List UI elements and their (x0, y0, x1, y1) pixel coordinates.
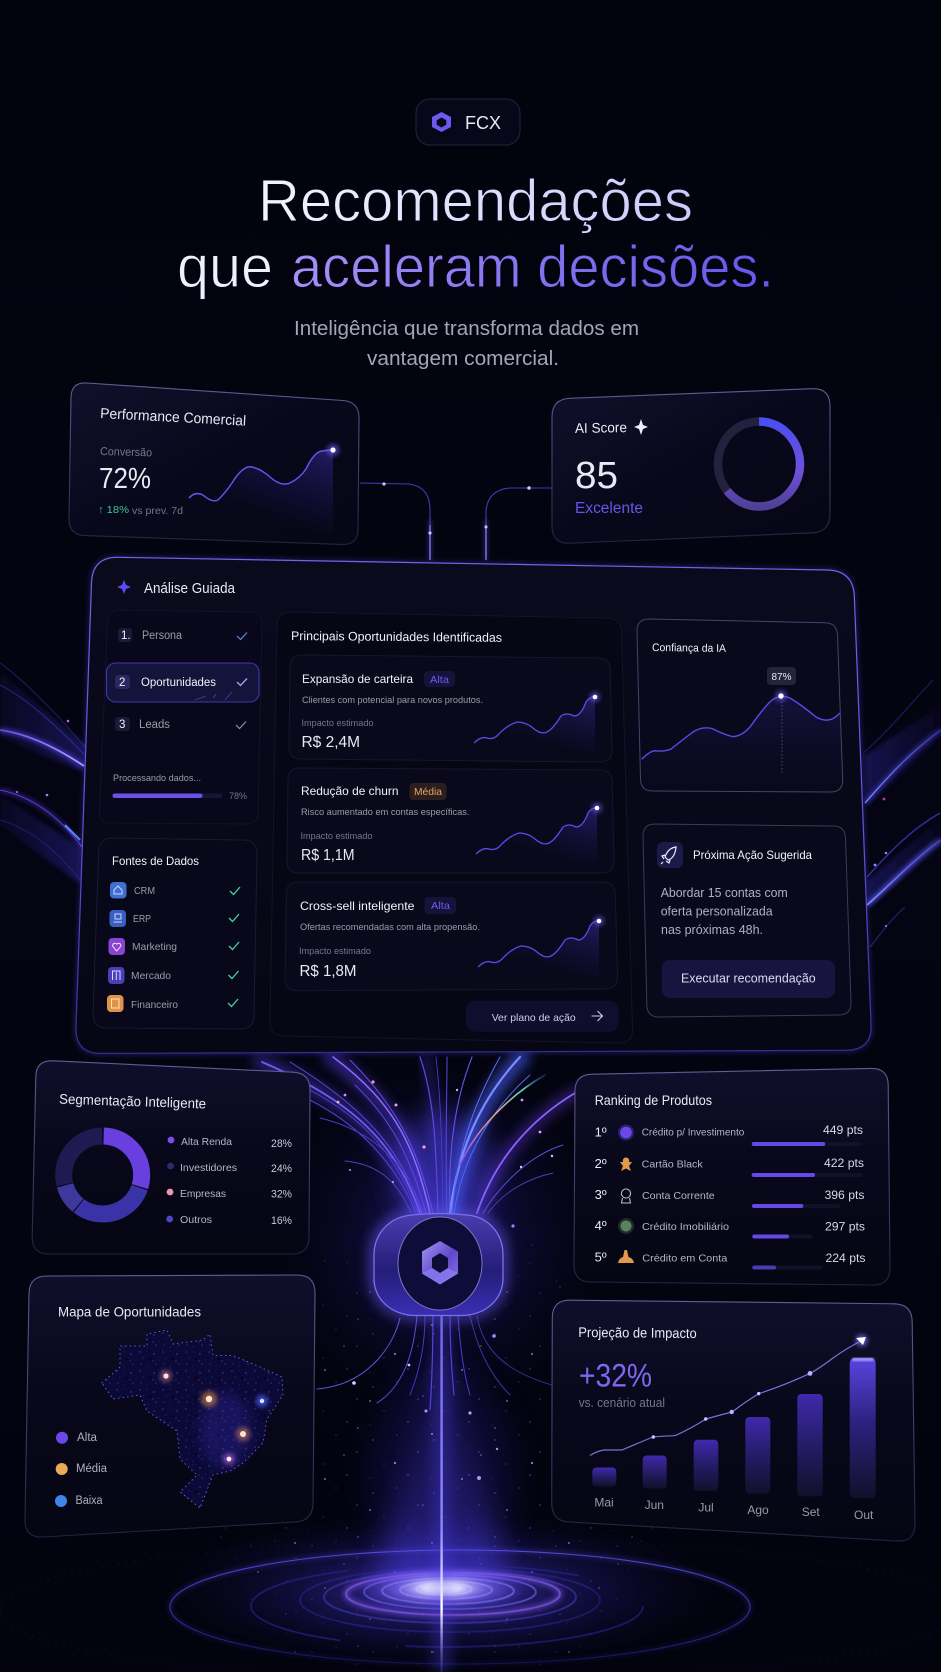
source: Mercado: Mercado (131, 970, 171, 982)
ground glow and rings (0, 1330, 941, 1672)
decorative side light streaks, left (0, 663, 85, 884)
legend: 24% (271, 1163, 292, 1175)
icon: sparkle (634, 419, 648, 435)
sub-panel: Principais Oportunidades (270, 612, 633, 1043)
panel: Projeção de Impacto: Projeção de Impacto (578, 1324, 697, 1341)
tooltip: 87% (772, 672, 792, 683)
row 4: Crédito Imobiliário (642, 1221, 729, 1233)
row 4: 4º (595, 1218, 607, 1233)
sparkline (476, 803, 602, 863)
donut chart (64, 1136, 142, 1214)
sparkline (189, 444, 339, 532)
opportunity card 3: R$ 1,8M (300, 963, 356, 980)
month labels: Jun (645, 1498, 664, 1512)
icon: rocket (657, 842, 683, 868)
legend (166, 1136, 292, 1227)
sparkline (474, 692, 600, 752)
step 1 (118, 628, 247, 642)
panel: AI Score: Excelente (575, 500, 643, 517)
panel: AI Score: 85 (575, 455, 618, 497)
row 5 (595, 1250, 866, 1270)
opportunity card 1: Expansão de carteira (302, 672, 413, 686)
panel: AI Score (552, 389, 830, 543)
panel: Performance Comercial: 72% (99, 463, 151, 495)
opportunity card 3 (285, 882, 618, 991)
row 2 (595, 1156, 864, 1177)
sparkline (478, 916, 604, 976)
legend: Outros (180, 1214, 212, 1226)
opportunity card 2: Risco aumentado em contas específicas. (301, 807, 470, 818)
sub-panel: Fontes de Dados: Fontes de Dados (112, 854, 199, 868)
source: Mercado (108, 967, 238, 984)
legend: Alta (77, 1432, 98, 1444)
icon: FCX hexagon (432, 112, 451, 132)
row 5: 5º (595, 1250, 607, 1264)
panel heading: Análise Guiada (144, 581, 236, 597)
source: ERP: ERP (133, 913, 151, 925)
energy streams below hub (317, 1316, 552, 1480)
step 3: Leads (139, 719, 170, 731)
step 2 active (106, 663, 259, 702)
row 2: 2º (595, 1156, 607, 1171)
tag: Alta (431, 900, 450, 912)
panel: Mapa de Oportunidades (25, 1275, 315, 1537)
legend: 32% (271, 1189, 292, 1201)
opportunity card 3: Cross-sell inteligente (300, 899, 415, 913)
bar chart (592, 1358, 876, 1498)
button: Executar recomendação (662, 960, 835, 998)
row 4: 297 pts (825, 1220, 865, 1234)
opportunity card 1: Impacto estimado (302, 718, 374, 729)
title: que (177, 234, 273, 300)
month labels: Set (802, 1505, 820, 1519)
step 1: Persona (142, 630, 183, 642)
legend: 16% (271, 1215, 292, 1227)
brand pill (416, 99, 520, 145)
row 3: 396 pts (824, 1188, 864, 1202)
source: Financeiro: Financeiro (131, 999, 178, 1011)
opportunity card 2: R$ 1,1M (301, 847, 354, 864)
row 2: Cartão Black (642, 1158, 703, 1170)
tag (410, 783, 446, 800)
connectors to main panel (360, 482, 552, 560)
opportunity card 1: R$ 2,4M (302, 734, 360, 751)
recommendation text: nas próximas 48h. (661, 922, 763, 937)
sub-panel: steps (99, 610, 262, 824)
energy streams above hub (260, 1057, 575, 1228)
decorative side light streaks, right (863, 680, 941, 947)
subtitle: Inteligência que transforma dados em (294, 318, 639, 340)
trend line (590, 1334, 868, 1456)
source: Marketing: Marketing (132, 941, 177, 953)
row 3 (595, 1187, 864, 1208)
panel: AI Score: AI Score (575, 419, 627, 436)
sub-panel: Confiança da IA: Confiança da IA (652, 642, 727, 655)
progress: Processando dados... (113, 773, 201, 784)
panel: Projeção de Impacto (552, 1300, 915, 1541)
trend delta: vs prev. 7d (132, 505, 183, 517)
row 3: 3º (595, 1187, 607, 1202)
button: Ver plano de ação: Ver plano de ação (492, 1012, 576, 1024)
opportunity card 3: Impacto estimado (299, 946, 371, 957)
legend: 28% (271, 1138, 292, 1150)
row 4 (595, 1218, 865, 1238)
source: Marketing (108, 938, 239, 955)
sub-panel: Próxima Ação Sugerida: Próxima Ação Sugerida (693, 848, 812, 862)
recommendation text: oferta personalizada (661, 904, 773, 918)
row 1: Crédito p/ Investimento (642, 1128, 745, 1139)
title (177, 168, 774, 300)
title: Recomendações (258, 168, 693, 234)
tooltip (767, 667, 796, 685)
row 1: 449 pts (823, 1123, 863, 1137)
step 3: 3 (119, 719, 125, 731)
progress: 78% (229, 791, 248, 802)
starfield (214, 1240, 676, 1665)
tag: Média (414, 786, 442, 798)
row 1: 1º (595, 1124, 607, 1140)
map of Brazil (102, 1330, 283, 1508)
panel: Análise Guiada (25, 557, 915, 1541)
source: CRM: CRM (134, 885, 155, 897)
opportunity card 3: Ofertas recomendadas com alta propensão. (300, 922, 480, 933)
row 3: Conta Corrente (642, 1190, 715, 1202)
panel: Ranking de Produtos (574, 1068, 890, 1285)
panel: Projeção de Impacto: vs. cenário atual (579, 1396, 665, 1410)
panel: Performance Comercial: Performance Comercial (100, 406, 246, 430)
step 1: 1. (121, 630, 131, 642)
progress (112, 773, 248, 802)
opportunity card 1 (289, 655, 612, 762)
month labels: Jul (698, 1500, 714, 1514)
sub-panel: Próxima Ação Sugerida (643, 824, 851, 1017)
opportunity card 2: Redução de churn (301, 784, 398, 798)
brand name: FCX (465, 113, 501, 133)
panel: Segmentação Inteligente (32, 1061, 310, 1254)
row 5: Crédito em Conta (642, 1252, 727, 1264)
source: ERP (110, 910, 239, 927)
legend: Média (76, 1463, 108, 1475)
legend: Investidores (180, 1162, 237, 1174)
icon: hexagon logo (422, 1241, 458, 1284)
month labels (594, 1495, 874, 1522)
stream sparks (337, 1080, 553, 1228)
month labels: Ago (747, 1503, 769, 1517)
sub-panel: Fontes de Dados (93, 838, 257, 1029)
line chart (642, 690, 842, 790)
opportunity card 2: Impacto estimado (300, 831, 372, 842)
tag: Alta (430, 674, 449, 686)
row 1 (595, 1123, 863, 1146)
score ring (718, 422, 800, 506)
tag (424, 897, 456, 914)
row 2: 422 pts (824, 1156, 864, 1170)
month labels: Out (854, 1508, 874, 1522)
month labels: Mai (594, 1495, 614, 1509)
subtitle: vantagem comercial. (367, 348, 559, 370)
button: Executar recomendação: Executar recomendação (681, 972, 816, 986)
panel: Mapa de Oportunidades: Mapa de Oportunidades (58, 1304, 201, 1320)
sub-panel: Principais Oportunidades: Principais Oportunidades Identificadas (291, 629, 502, 645)
tag (424, 671, 455, 687)
trend delta (98, 504, 183, 517)
source: CRM (110, 882, 240, 898)
row 5: 224 pts (826, 1251, 866, 1265)
source: Financeiro (107, 995, 238, 1012)
panel: Segmentação Inteligente: Segmentação Inteligente (59, 1091, 207, 1111)
title: aceleram decisões. (291, 234, 774, 300)
legend: Alta Renda (181, 1136, 232, 1148)
central hub (374, 1214, 503, 1316)
panel: Performance Comercial: Conversão (100, 446, 152, 459)
step 3 (115, 717, 246, 731)
trend delta: ↑ 18% (98, 504, 129, 516)
recommendation text (661, 885, 788, 937)
subtitle (294, 318, 639, 370)
light beam (432, 1316, 452, 1672)
panel: Projeção de Impacto: +32% (579, 1358, 652, 1394)
panel: Ranking de Produtos: Ranking de Produtos (595, 1092, 712, 1108)
panel: Performance Comercial (69, 383, 359, 544)
opportunity card 1: Clientes com potencial para novos produtos. (302, 695, 483, 706)
hub ambient glow (280, 1070, 600, 1410)
legend: Baixa (76, 1495, 103, 1507)
sub-panel: Confiança da IA (637, 619, 843, 792)
recommendation text: Abordar 15 contas com (661, 885, 788, 900)
icon: sparkle (117, 580, 131, 594)
legend: Empresas (180, 1188, 226, 1200)
opportunity card 2 (287, 768, 614, 873)
step 2 active: Oportunidades (141, 677, 216, 689)
step 2 active: 2 (119, 677, 125, 689)
button: Ver plano de ação (466, 1001, 619, 1032)
legend (55, 1432, 108, 1507)
